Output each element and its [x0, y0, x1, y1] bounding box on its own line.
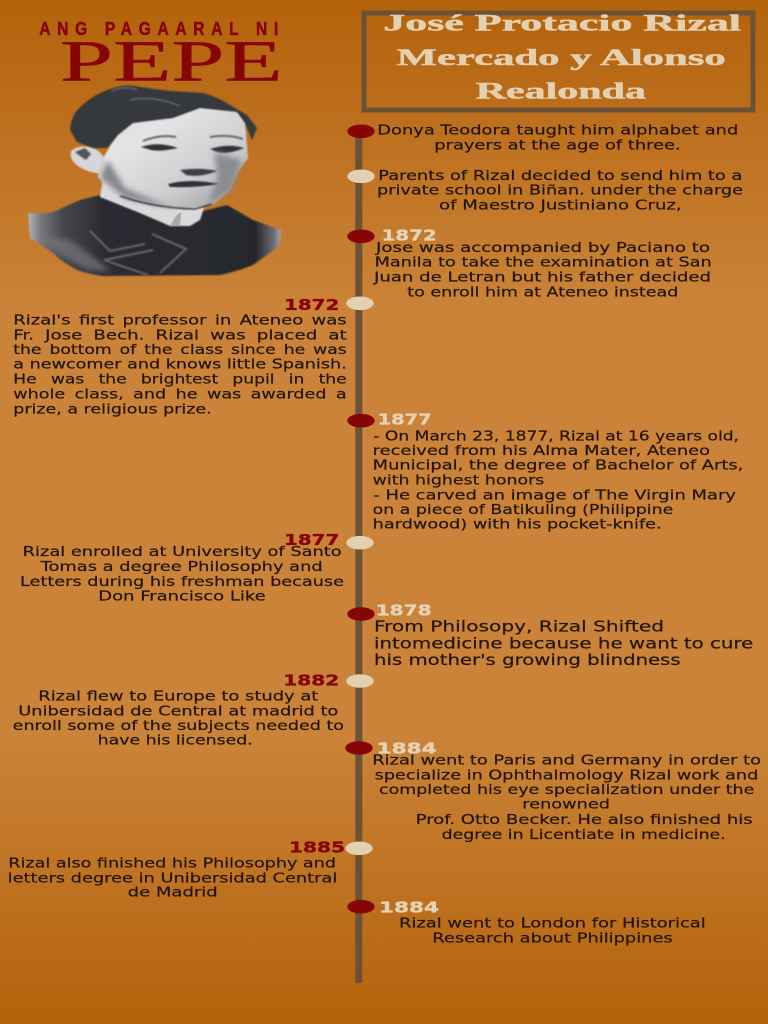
timeline markers — [345, 124, 375, 914]
event: 1884 Paris and Germany: completed his eye specialization under the — [379, 782, 754, 798]
event: 1884 Paris and Germany: degree in Licentiate in medicine. — [442, 827, 726, 843]
event: school in Binan: Parents of Rizal decided to send him to a — [378, 168, 742, 184]
event: 1882 Europe: Rizal flew to Europe to study at — [38, 689, 319, 705]
event: school in Binan: private school in Biñan. under the charge — [377, 183, 743, 199]
name text: Mercado y Alonso — [397, 45, 726, 70]
event: 1884 London — [379, 898, 706, 947]
event: 1884 London: 1884 — [379, 898, 439, 916]
nose, mouth and shading — [100, 152, 242, 209]
event: Donya Teodora: Donya Teodora taught him alphabet and — [377, 122, 738, 138]
event: 1884 Paris and Germany: specialize in Ophthalmology Rizal work and — [375, 767, 758, 783]
name text — [383, 11, 741, 104]
heading: Ang Pagaaral ni Pepe — [39, 19, 283, 93]
event: 1872 Manila: Manila to take the examination at San — [375, 255, 712, 271]
event: 1877 University of Santo Tomas: Don Francisco Like — [98, 589, 266, 605]
event: 1872 Manila: to enroll him at Ateneo instead — [407, 285, 678, 301]
event: 1877 Bachelor of Arts: Municipal, the degree of Bachelor of Arts, — [373, 458, 743, 474]
event: 1882 Europe: enroll some of the subjects needed to — [13, 718, 344, 734]
event: 1878 medicine: From Philosopy, Rizal Shifted — [374, 618, 664, 636]
event: 1877 Bachelor of Arts — [373, 410, 743, 533]
event: 1872 Ateneo professor: Fr. Jose Bech. Rizal was placed at — [13, 327, 348, 343]
event: 1877 Bachelor of Arts: - He carved an image of The Virgin Mary — [373, 487, 736, 503]
event: 1882 Europe — [13, 671, 344, 749]
event: 1885 Philosophy and Letters — [8, 838, 345, 901]
event: 1877 Bachelor of Arts: - On March 23, 1877, Rizal at 16 years old, — [373, 428, 739, 444]
event: 1878 medicine — [374, 601, 753, 669]
event: 1885 Philosophy and Letters: 1885 — [289, 838, 345, 856]
event: 1885 Philosophy and Letters: letters degree in Unibersidad Central — [8, 870, 337, 886]
event: 1882 Europe: Unibersidad de Central at madrid to — [18, 703, 338, 719]
event: 1877 Bachelor of Arts: received from his Alma Mater, Ateneo — [373, 443, 710, 459]
heading: Ang Pagaaral ni Pepe: PEPE — [60, 28, 283, 93]
event: 1872 Manila — [373, 227, 712, 301]
portrait of Jose Rizal — [28, 86, 281, 276]
event: school in Binan — [377, 168, 743, 213]
event: 1885 Philosophy and Letters: Rizal also finished his Philosophy and — [8, 855, 336, 871]
event: 1877 University of Santo Tomas: 1877 — [284, 531, 339, 549]
event: 1885 Philosophy and Letters: de Madrid — [128, 885, 218, 901]
event: 1877 University of Santo Tomas — [20, 531, 344, 605]
event: 1884 Paris and Germany: Rizal went to Paris and Germany in order to — [372, 753, 761, 769]
event: 1877 University of Santo Tomas: Letters during his freshman because — [20, 574, 344, 590]
event: 1872 Ateneo professor — [13, 296, 348, 418]
heading: Ang Pagaaral ni Pepe: ANG PAGAARAL NI — [39, 19, 278, 39]
event: 1872 Ateneo professor: He was the brightest pupil in the — [13, 372, 347, 388]
event: 1884 Paris and Germany: Prof. Otto Becker. He also finished his — [416, 812, 753, 828]
event: 1877 University of Santo Tomas: Rizal enrolled at University of Santo — [23, 544, 342, 560]
event: 1884 Paris and Germany — [372, 739, 761, 843]
event: Donya Teodora: prayers at the age of three. — [434, 138, 681, 154]
event: 1882 Europe: have his licensed. — [98, 733, 253, 749]
event: 1877 Bachelor of Arts: with highest honors — [373, 472, 544, 488]
event: 1872 Manila: Jose was accompanied by Paciano to — [375, 240, 710, 256]
name box — [364, 11, 753, 110]
timeline spine — [355, 132, 362, 983]
eyebrows and eyes — [141, 136, 244, 153]
event: 1872 Ateneo professor: prize, a religious prize. — [13, 402, 212, 418]
event: 1877 University of Santo Tomas: Tomas a degree Philosophy and — [39, 559, 323, 575]
event: 1878 medicine: 1878 — [376, 601, 432, 619]
event: 1872 Ateneo professor: whole class, and he was awarded a — [13, 387, 347, 403]
event: 1884 Paris and Germany: 1884 — [377, 739, 437, 757]
event: school in Binan: of Maestro Justiniano Cruz, — [439, 197, 682, 213]
coat lapels — [90, 231, 186, 275]
event: 1872 Ateneo professor: the bottom of the class since he was — [13, 342, 347, 358]
name text: Realonda — [476, 79, 647, 104]
event: 1872 Manila: Juan de Letran but his father decided — [373, 270, 711, 286]
event: 1878 medicine: intomedicine because he want to cure — [374, 634, 753, 652]
event: 1872 Ateneo professor: a newcomer and knows little Spanish. — [13, 357, 347, 373]
event: 1872 Ateneo professor: 1872 — [284, 296, 339, 314]
event: Donya Teodora — [377, 122, 738, 154]
event: 1872 Ateneo professor: Rizal's first professor in Ateneo was — [13, 312, 347, 328]
name text: José Protacio Rizal — [383, 11, 741, 36]
event: 1877 Bachelor of Arts: hardwood) with his pocket-knife. — [373, 517, 662, 533]
event: 1877 Bachelor of Arts: 1877 — [378, 410, 432, 428]
event: 1884 London: Rizal went to London for Historical — [399, 916, 706, 932]
event: 1877 Bachelor of Arts: on a piece of Batikuling (Philippine — [373, 502, 673, 518]
event: 1884 Paris and Germany: renowned — [522, 797, 610, 813]
event: 1882 Europe: 1882 — [283, 671, 339, 689]
event: 1884 London: Research about Philippines — [432, 931, 673, 947]
event: 1878 medicine: his mother's growing blindness — [374, 651, 681, 669]
event: 1872 Manila: 1872 — [382, 227, 437, 245]
